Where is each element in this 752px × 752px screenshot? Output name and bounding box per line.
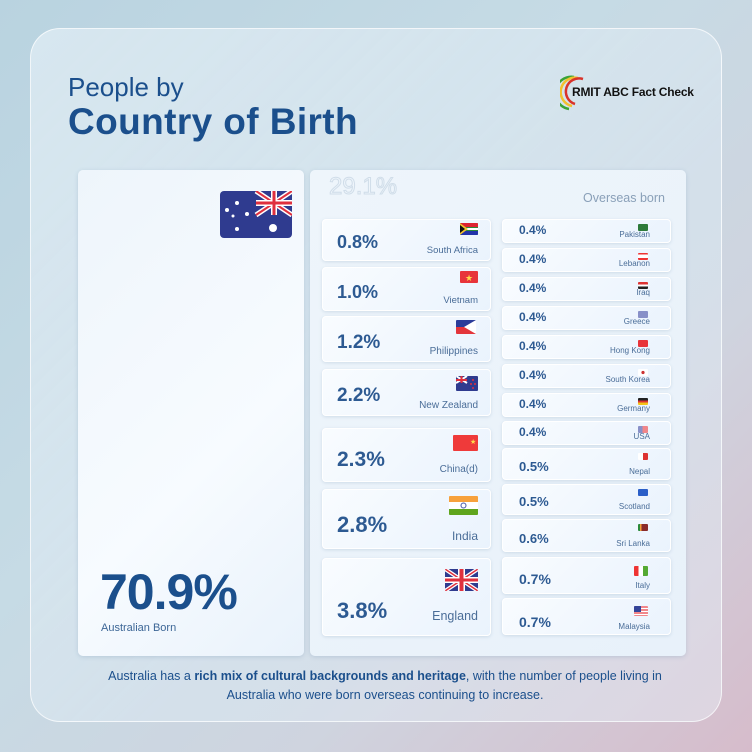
card: south korea: South Korea [606,375,650,384]
card: south africa: 0.8% [337,232,378,252]
card: iraq: 0.4% [519,281,546,295]
card: pakistan: 0.4% [519,223,546,237]
card: italy: Italy [635,581,650,590]
card: india: 2.8% [337,512,387,537]
card: italy [502,557,671,594]
card: philippines: Philippines [430,346,478,357]
card: greece: Greece [624,317,650,326]
title: People by [68,72,184,102]
card: greece: 0.4% [519,310,546,324]
card: pakistan [502,219,671,243]
card: germany: 0.4% [519,397,546,411]
card: nepal [502,448,671,480]
card: china: 2.3% [337,448,385,471]
card: sri lanka [502,519,671,552]
card: iraq: Iraq [636,288,650,297]
card: south korea [502,364,671,388]
card: england [322,558,491,636]
card: iraq [502,277,671,301]
card: south korea: 0.4% [519,368,546,382]
card: south africa: South Africa [427,245,478,256]
card: hong kong: Hong Kong [610,346,650,355]
title: Country of Birth [68,101,358,142]
card: germany [502,393,671,417]
card: usa [502,421,671,445]
card: india [322,489,491,549]
card: germany: Germany [617,404,650,413]
card: england: England [432,609,478,623]
card: malaysia [502,598,671,635]
card: england: 3.8% [337,598,387,623]
card: new zealand [322,369,491,416]
card: usa: USA [634,432,650,441]
card: china: China(d) [440,464,478,475]
card: nepal: 0.5% [519,459,549,474]
label: australian born: Australian Born [101,622,176,634]
title [68,72,358,142]
card: south africa [322,219,491,261]
card: china: ★ [470,438,476,446]
icon: australian flag [220,191,292,238]
card: italy: 0.7% [519,571,551,587]
card: hong kong [502,335,671,359]
stat: 29.1%: 29.1% [329,173,397,200]
footer text: Australia has a rich mix of cultural backgrounds and heritage, with the number of people living in Australia who were born overseas continuing to increase. [108,669,662,702]
card: sri lanka: Sri Lanka [616,539,650,548]
card: vietnam: Vietnam [443,295,478,306]
label: overseas born: Overseas born [583,191,665,205]
logo [560,76,694,110]
card: nepal: Nepal [629,467,650,476]
panel: overseas born [310,170,686,656]
card: lebanon [502,248,671,272]
card: vietnam: 1.0% [337,282,378,302]
card: lebanon: 0.4% [519,252,546,266]
card: philippines [322,316,491,362]
card: scotland: Scotland [619,502,650,511]
card: usa: 0.4% [519,425,546,439]
card: scotland: 0.5% [519,494,549,509]
card: greece [502,306,671,330]
card: india: India [452,529,478,543]
card: philippines: 1.2% [337,332,380,353]
card: lebanon: Lebanon [619,259,650,268]
card: vietnam [322,267,491,311]
card: china [322,428,491,482]
card: sri lanka: 0.6% [519,531,549,546]
card: malaysia: Malaysia [618,622,650,631]
card: pakistan: Pakistan [619,230,650,239]
card: scotland [502,484,671,515]
card: vietnam: ★ [465,273,473,283]
card: new zealand: 2.2% [337,385,380,406]
panel: australian born [78,170,304,656]
card: new zealand: New Zealand [419,400,478,411]
stat: 70.9%: 70.9% [100,564,237,620]
card: malaysia: 0.7% [519,614,551,630]
logo: RMIT ABC Fact Check [572,85,694,99]
card: hong kong: 0.4% [519,339,546,353]
